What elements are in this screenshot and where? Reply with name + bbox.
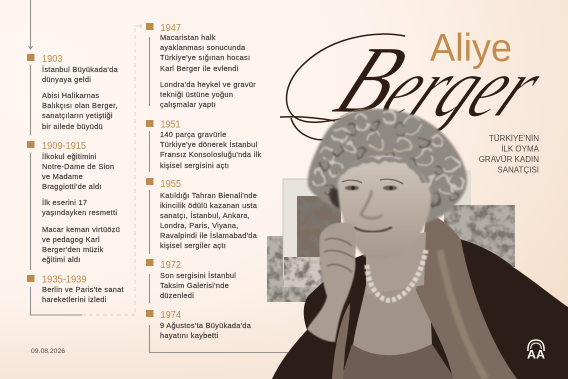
photo: artworks behind the portrait [267, 170, 515, 302]
timeline entry 1903 [27, 53, 118, 135]
timeline entry 1951 [146, 118, 261, 172]
timeline entry 1972 [146, 259, 236, 303]
connector arrow into timeline [28, 0, 32, 49]
hair curls [311, 111, 463, 205]
timeline entry 1972: Taksim Galerisi'nde [160, 281, 229, 290]
finger lines [324, 238, 354, 272]
timeline entry 1909-1915 [27, 140, 120, 270]
scarf fold [440, 250, 486, 379]
timeline entry 1947: çalışmalar yaptı [160, 100, 216, 109]
hair mass [308, 109, 467, 222]
timeline entry 1974: hayatını kaybetti [160, 331, 218, 340]
artwork: right engraving [444, 205, 515, 267]
timeline entry 1972: düzenledi [160, 291, 194, 300]
title: Aliye: Aliye [430, 27, 512, 70]
timeline entry 1947: 1947 [160, 22, 181, 34]
right eye [380, 179, 403, 190]
timeline entry 1947: ayaklanması sonucunda [160, 43, 246, 52]
forehead fringe [340, 159, 426, 182]
necklace [367, 250, 426, 300]
timeline entry 1951: Fransız Konsolosluğu'nda ilk [160, 150, 261, 159]
timeline entry 1903: İstanbul Büyükada'da [42, 65, 118, 74]
flourish over hair [340, 109, 435, 151]
timeline entry 1955: sanatçı, İstanbul, Ankara, [160, 211, 250, 220]
photo: portrait of Aliye Berger [272, 109, 568, 379]
timeline entry 1935-1939: 1935-1939 [42, 274, 87, 286]
logo: AA: AA [527, 348, 545, 362]
timeline entry 1909-1915: Macar keman virtüözü [42, 225, 120, 234]
timeline entry 1972: 1972 [160, 259, 181, 271]
subtitle: GRAVÜR KADIN [479, 155, 539, 164]
subtitle [479, 134, 540, 174]
sweater [272, 238, 568, 379]
timeline entry 1909-1915: ve Madame [42, 172, 83, 181]
timeline entry 1974: 1974 [160, 309, 181, 321]
nose [361, 190, 382, 218]
timeline entry 1947: Macaristan halk [160, 33, 216, 42]
timeline entry 1903: bir ailede büyüdü [42, 122, 103, 131]
subtitle: İLK OYMA [501, 144, 540, 154]
timeline entry 1909-1915: Berger'den müzik [42, 245, 104, 254]
dark hair shadow by temple [329, 188, 341, 209]
timeline entry 1947: Londra'da heykel ve gravür [160, 80, 256, 89]
scarf left [332, 303, 350, 379]
timeline entry 1935-1939: Berlin ve Paris'te sanat [42, 285, 124, 294]
artwork: left engraving [267, 236, 325, 302]
timeline entry 1903: Abisi Halikarnas [42, 91, 99, 100]
artwork: grey wall behind hair [425, 170, 471, 206]
timeline entry 1947: tekniği üstüne yoğun [160, 90, 233, 99]
face [338, 156, 431, 259]
timeline entry 1972: Son sergisini İstanbul [160, 271, 236, 280]
timeline entry 1955: Londra, Paris, Viyana, [160, 221, 239, 230]
timeline entry 1955: ikincilik ödülü kazanan usta [160, 201, 258, 210]
timeline entry 1909-1915: ve pedagog Karl [42, 235, 100, 244]
timeline entry 1951: 1951 [160, 118, 181, 130]
timeline entry 1951: 140 parça gravürle [160, 130, 226, 139]
timeline entry 1947 [146, 22, 256, 109]
timeline entry 1909-1915: eğitimi aldı [42, 255, 81, 264]
mouth [354, 227, 392, 232]
left eye [342, 180, 362, 190]
timeline entry 1955 [146, 178, 258, 254]
dashed connector between columns [82, 24, 142, 315]
timeline entry 1903: 1903 [42, 53, 63, 65]
timeline entry 1955: Katıldığı Tahran Bienali'nde [160, 191, 257, 200]
hand and forearm [307, 222, 356, 342]
chest [353, 240, 432, 356]
timeline entry 1903: Balıkçısı olan Berger, [42, 101, 118, 110]
timeline entry 1947: Türkiye'ye sığınan hocası [160, 53, 250, 62]
top under scarf [341, 344, 455, 379]
timeline entry 1974 [146, 309, 290, 352]
timeline entry 1909-1915: Notre-Dame de Sion [42, 162, 114, 171]
timeline entry 1909-1915: yaşındayken resmetti [42, 208, 117, 217]
artwork: dark floral panel [297, 196, 341, 257]
timeline: left column [27, 0, 142, 315]
subtitle: SANATÇISI [497, 166, 539, 174]
artwork: white framed print [283, 179, 345, 280]
timeline entry 1903: dünyaya geldi [42, 75, 91, 84]
timeline entry 1903: sanatçıların yetiştiği [42, 111, 113, 120]
date: 09.08.2026 [31, 348, 65, 355]
timeline entry 1909-1915: İlkokul eğitimini [42, 152, 97, 161]
timeline entry 1955: 1955 [160, 178, 181, 190]
timeline entry 1955: Ravalpindi ile İslamabad'da [160, 231, 258, 240]
subtitle: TÜRKİYE'NİN [489, 134, 539, 143]
timeline entry 1951: Türkiye'ye dönerek İstanbul [160, 140, 258, 149]
timeline entry 1935-1939 [27, 274, 124, 315]
timeline: middle column [146, 22, 290, 352]
timeline entry 1955: kişisel sergiler açtı [160, 241, 226, 250]
artwork: print lower wash [284, 257, 330, 287]
timeline entry 1947: Karl Berger ile evlendi [160, 64, 239, 73]
title: Berger script: B [320, 26, 423, 133]
timeline entry 1909-1915: İlk eserini 17 [42, 198, 87, 207]
neck [366, 232, 426, 295]
logo: AA [527, 340, 545, 362]
timeline entry 1974: 9 Ağustos'ta Büyükada'da [160, 321, 252, 330]
title: Berger script: erger [365, 41, 561, 135]
title: Berger script [280, 26, 561, 140]
timeline entry 1951: kişisel sergisini açtı [160, 161, 229, 170]
scarf right [416, 212, 517, 379]
timeline entry 1935-1939: hareketlerini izledi [42, 295, 107, 304]
timeline entry 1909-1915: Braggiotti'de aldı [42, 182, 102, 191]
timeline entry 1909-1915: 1909-1915 [42, 140, 86, 152]
